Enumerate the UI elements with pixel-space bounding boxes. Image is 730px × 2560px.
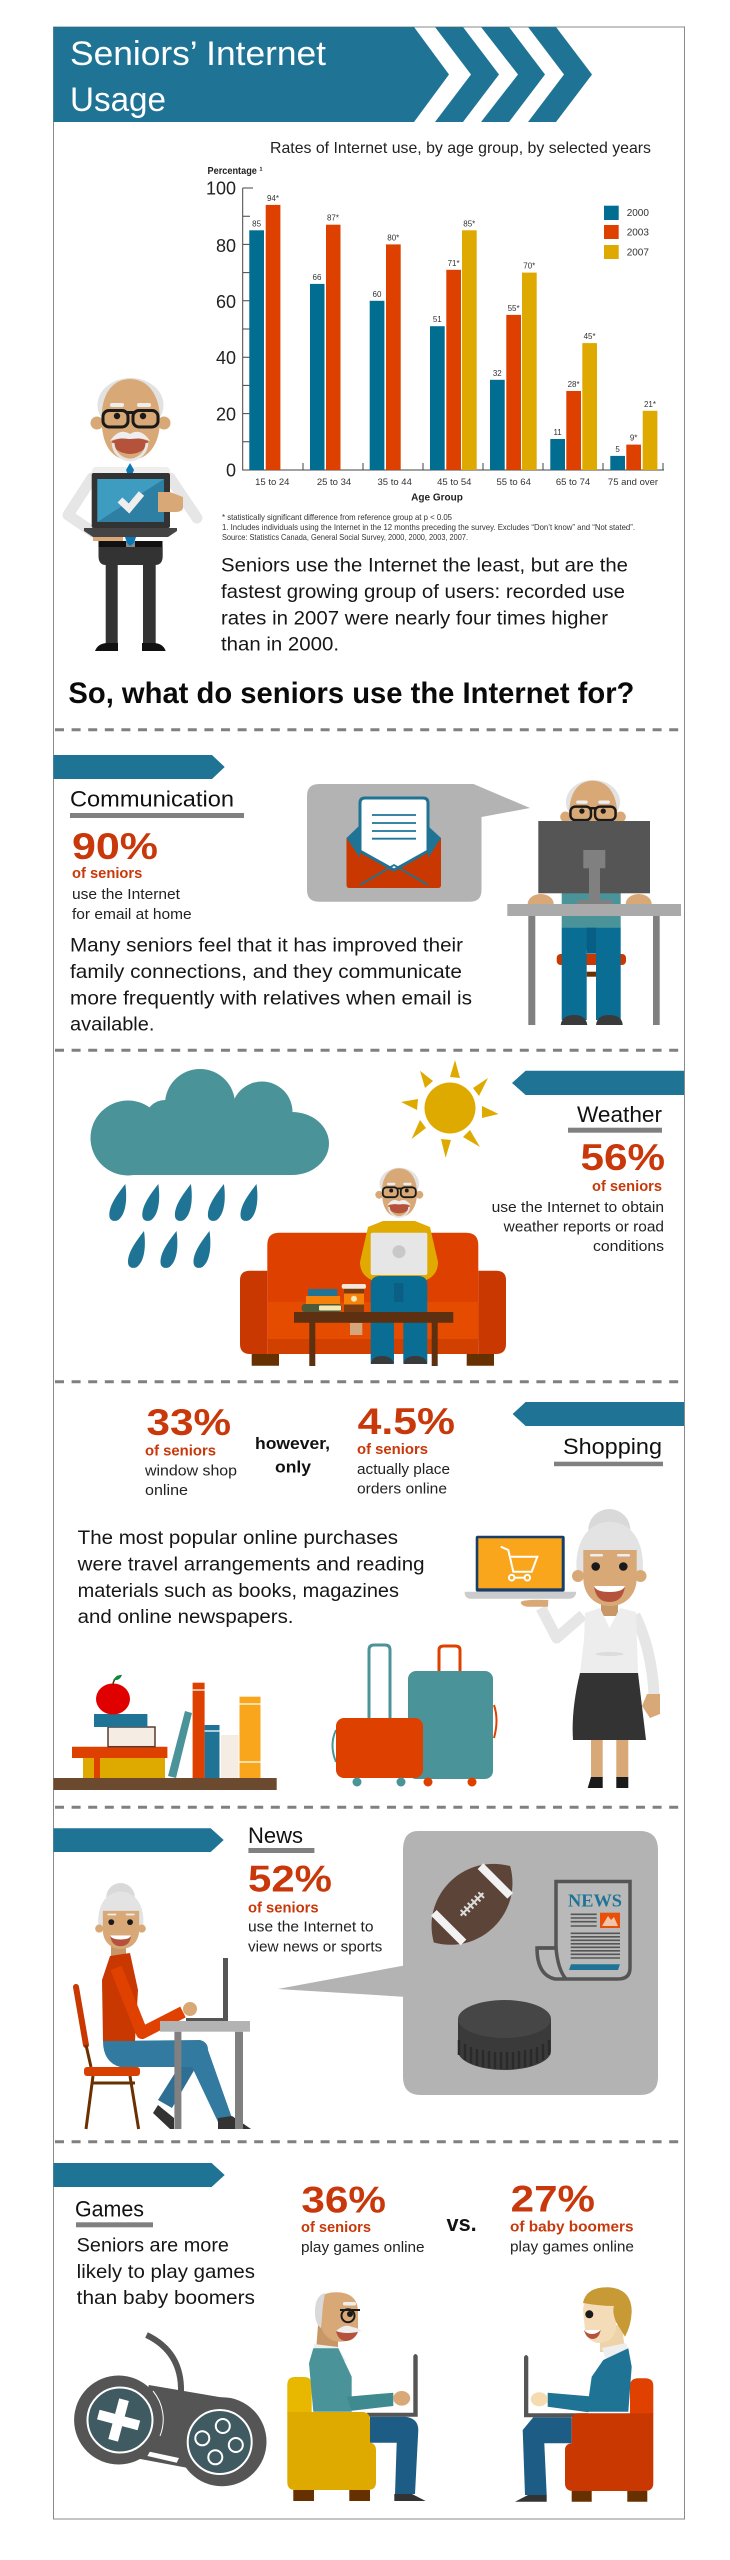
paragraph: likely to play games — [77, 2261, 255, 2283]
trousers — [371, 1276, 427, 1363]
laptop screen — [97, 479, 164, 522]
legs — [591, 1738, 628, 1778]
description: online — [145, 1482, 188, 1499]
bar chart: rates of Internet use — [206, 140, 664, 504]
description: weather reports or road — [503, 1219, 664, 1236]
teal handle — [369, 1645, 390, 1720]
hanging arm — [635, 1615, 654, 1695]
chevron 1 — [435, 27, 499, 122]
slit — [147, 2452, 179, 2463]
connector text: only — [275, 1458, 312, 1477]
illustration: senior in armchair — [287, 2292, 426, 2501]
title text line 2: Usage — [70, 81, 166, 119]
stat 56%: 56% — [580, 1137, 665, 1178]
of seniors: of seniors — [357, 1441, 428, 1458]
back shoe — [153, 2105, 174, 2129]
orange upright book — [240, 1697, 260, 1778]
y axis labels: 60 — [216, 292, 236, 312]
hand — [158, 492, 183, 512]
value labels: 5 — [615, 445, 620, 454]
heading underline — [554, 1462, 663, 1466]
panel: games — [54, 2163, 653, 2502]
paragraph — [77, 1527, 425, 1628]
pants hips — [98, 547, 163, 565]
intro paragraph: Seniors use the Internet the least, but are the — [221, 555, 628, 577]
y axis heading: Percentage ¹ — [208, 166, 263, 177]
teal case — [408, 1671, 493, 1779]
monitor stand — [577, 850, 612, 904]
paragraph: family connections, and they communicate — [70, 961, 462, 983]
stat 90%: 90% — [72, 826, 158, 867]
description: use the Internet to — [248, 1919, 374, 1936]
category labels: 65 to 74 — [556, 477, 590, 488]
front shoe — [218, 2116, 251, 2129]
laptop lid — [92, 473, 170, 528]
sofa back — [267, 1233, 478, 1340]
value labels: 51 — [433, 315, 442, 324]
description: orders online — [357, 1481, 447, 1498]
banner arrow body — [54, 27, 449, 122]
chair — [557, 954, 626, 965]
description: use the Internet to obtain — [492, 1199, 664, 1216]
category labels: 55 to 64 — [497, 477, 531, 488]
chart footnotes: 1. Includes individuals using the Internet in the 12 months preceding the survey. Excludes “Don’t know” and “Not stated”. — [222, 522, 635, 532]
sleeve — [548, 2393, 595, 2412]
sofa arm right — [478, 1271, 506, 1354]
illustration: woman at laptop — [76, 1883, 251, 2129]
screen shade — [97, 479, 164, 522]
blue book — [94, 1714, 147, 1727]
vs: vs. — [446, 2211, 477, 2236]
legs — [106, 565, 156, 645]
red handle — [439, 1646, 460, 1671]
icon: shopping cart — [501, 1547, 537, 1580]
heading: Communication — [70, 787, 234, 812]
icon: hockey puck — [458, 2000, 551, 2070]
value labels: 66 — [313, 273, 322, 282]
apple — [96, 1675, 130, 1714]
book stripes — [193, 1690, 260, 1762]
paragraph: were travel arrangements and reading — [77, 1554, 425, 1576]
hand — [531, 2392, 548, 2406]
chart footnotes — [222, 512, 635, 542]
heading: News — [248, 1823, 303, 1848]
bars 2003 — [266, 205, 641, 470]
intro paragraph: than in 2000. — [221, 634, 339, 656]
heading: so, what do seniors use the Internet for: So, what do seniors use the Internet for? — [68, 677, 634, 710]
pale book — [108, 1727, 155, 1747]
description — [492, 1199, 664, 1255]
category labels: 25 to 34 — [317, 477, 351, 488]
paragraph — [70, 935, 472, 1036]
leaning book — [168, 1711, 192, 1778]
cable — [146, 2335, 181, 2392]
y axis labels: 40 — [216, 348, 236, 368]
value labels: 9* — [630, 434, 637, 443]
value labels — [252, 194, 656, 454]
category labels: 15 to 24 — [255, 477, 289, 488]
shoes — [371, 1356, 427, 1364]
belt — [98, 541, 162, 547]
illustration: woman holding laptop — [465, 1509, 660, 1788]
description: conditions — [593, 1238, 664, 1255]
shoe — [515, 2495, 547, 2502]
chair frame — [86, 2045, 139, 2129]
section tab — [513, 1402, 684, 1426]
torso — [309, 2348, 352, 2412]
panel: weather — [90, 1060, 684, 1366]
sofa feet — [252, 1354, 494, 1366]
paragraph: than baby boomers — [77, 2287, 255, 2309]
value labels: 55* — [508, 304, 520, 313]
body — [135, 2385, 225, 2474]
chart footnotes: * statistically significant difference from reference group at p < 0.05 — [222, 512, 452, 522]
shirt arms — [68, 478, 197, 532]
y axis labels: 100 — [206, 178, 236, 198]
value labels: 85 — [252, 219, 262, 228]
section tab — [512, 1071, 684, 1095]
of seniors: of seniors — [301, 2219, 371, 2236]
shirt shoulders — [92, 467, 170, 479]
hand — [393, 2391, 410, 2406]
description line 1: use the Internet — [72, 886, 181, 903]
connector text: however, — [255, 1434, 330, 1453]
laptop logo — [392, 1245, 406, 1258]
illustration: senior man holding laptop — [68, 378, 197, 651]
back leg — [158, 2065, 196, 2108]
shoe — [394, 2494, 426, 2501]
panel: shopping — [54, 1401, 684, 1790]
heading underline — [248, 1848, 314, 1853]
description: window shop — [144, 1463, 237, 1480]
neck — [316, 2325, 338, 2352]
head — [95, 1883, 146, 1949]
laptop base — [84, 528, 177, 537]
sleeve — [347, 2393, 393, 2411]
icon: newspaper — [537, 1882, 630, 1979]
icon: cloud — [90, 1069, 329, 1176]
value labels: 71* — [448, 259, 460, 268]
head — [572, 1509, 646, 1606]
head — [583, 2287, 632, 2343]
legend: 2003 — [627, 227, 649, 238]
chair back — [76, 1987, 86, 2045]
value labels: 21* — [644, 400, 656, 409]
intro paragraph: fastest growing group of users: recorded use — [221, 581, 625, 603]
value labels: 70* — [523, 262, 535, 271]
torso — [587, 2348, 632, 2412]
panel: communication — [54, 755, 681, 1036]
illustration: baby boomer in armchair — [515, 2287, 653, 2502]
legend: 2000 — [627, 208, 649, 219]
collar — [602, 2343, 628, 2360]
laptop — [186, 1958, 228, 2021]
face — [90, 378, 170, 460]
neck — [601, 1600, 618, 1616]
y axis labels: 20 — [216, 404, 236, 424]
trousers shade — [587, 928, 596, 954]
chair bar — [587, 972, 596, 977]
stat 36%: 36% — [301, 2180, 386, 2221]
chair base — [565, 2413, 653, 2491]
intro paragraph: rates in 2007 were nearly four times higher — [221, 608, 609, 630]
icon: envelope with letter — [346, 798, 441, 888]
neck — [111, 1943, 126, 1957]
raised hand — [521, 1600, 548, 1607]
intro paragraph — [221, 555, 628, 656]
value labels: 28* — [568, 380, 580, 389]
stat 33%: 33% — [146, 1402, 231, 1443]
heading: Shopping — [563, 1434, 662, 1459]
chair back — [630, 2378, 653, 2414]
trousers — [562, 928, 621, 1020]
orange case — [336, 1718, 423, 1778]
icon: game controller — [74, 2335, 266, 2486]
panel: news — [54, 1823, 658, 2129]
value labels: 87* — [327, 214, 339, 223]
description — [144, 1463, 237, 1499]
x axis title: Age Group — [411, 493, 463, 504]
monitor — [538, 821, 650, 893]
hands — [528, 894, 652, 904]
category labels — [255, 477, 658, 488]
heading: Games — [75, 2197, 144, 2222]
heading underline — [76, 2222, 153, 2227]
of baby boomers: of baby boomers — [510, 2219, 634, 2236]
check mark — [120, 494, 142, 508]
of seniors: of seniors — [72, 865, 142, 882]
laptop — [367, 2354, 418, 2417]
paragraph: Many seniors feel that it has improved their — [70, 935, 464, 957]
desk legs — [528, 916, 660, 1025]
laptop screen — [476, 1536, 565, 1592]
y axis labels — [206, 178, 236, 480]
tie top — [126, 463, 134, 475]
paragraph: materials such as books, magazines — [78, 1580, 399, 1602]
table legs — [174, 2032, 243, 2129]
buckle — [126, 541, 135, 547]
sofa base — [267, 1339, 478, 1354]
chair feet — [572, 2491, 647, 2502]
description line 2: for email at home — [72, 906, 192, 923]
description: actually place — [357, 1461, 450, 1478]
value labels: 80* — [387, 233, 399, 242]
description — [248, 1919, 382, 1956]
blouse waist shade — [596, 1652, 624, 1656]
shoes — [95, 643, 166, 651]
seat — [84, 2067, 140, 2076]
books on table — [302, 1289, 342, 1312]
value labels: 32 — [493, 369, 502, 378]
laptop — [371, 1233, 427, 1275]
value labels: 45* — [584, 332, 596, 341]
chevron 2 — [481, 27, 545, 122]
category labels: 35 to 44 — [378, 477, 412, 488]
stat 52%: 52% — [248, 1859, 332, 1900]
illustration: luggage — [332, 1645, 496, 1786]
stat 27%: 27% — [511, 2179, 595, 2220]
left pad — [74, 2376, 163, 2464]
blue upright book — [205, 1725, 220, 1778]
paragraph — [77, 2235, 255, 2309]
boots — [588, 1777, 632, 1788]
paragraph: available. — [70, 1014, 154, 1036]
bars 2007 — [462, 230, 657, 470]
axes and ticks — [243, 188, 664, 470]
trousers shade — [394, 1283, 403, 1302]
chair base — [287, 2412, 376, 2490]
right button plate — [188, 2410, 252, 2474]
neck — [600, 2325, 625, 2352]
blouse — [580, 1608, 638, 1673]
category labels: 45 to 54 — [437, 477, 471, 488]
tie bottom — [125, 537, 136, 546]
left pad edge — [153, 2391, 163, 2436]
y axis labels: 0 — [226, 460, 236, 480]
torso — [360, 1221, 438, 1283]
red book — [72, 1747, 167, 1778]
value labels: 94* — [267, 194, 279, 203]
connector text — [255, 1434, 330, 1477]
table — [294, 1312, 453, 1366]
illustration: man at desk — [507, 780, 681, 1025]
paragraph: The most popular online purchases — [78, 1527, 398, 1549]
laptop display — [478, 1538, 562, 1588]
value labels: 60 — [373, 290, 382, 299]
heading underline — [568, 1128, 662, 1133]
chart footnotes: Source: Statistics Canada, General Social Survey, 2000, 2000, 2003, 2007. — [222, 532, 468, 542]
icon: sun — [401, 1060, 499, 1158]
shoes — [561, 1015, 623, 1025]
collar — [314, 2344, 347, 2362]
trousers — [370, 2417, 418, 2494]
icon: football — [412, 1844, 532, 1965]
value labels: 85* — [463, 219, 475, 228]
legend: 2007 — [627, 248, 649, 259]
title text line 1: Seniors’ Internet — [70, 35, 327, 73]
illustration: books on shelf — [54, 1675, 277, 1790]
heading underline — [70, 813, 244, 818]
head — [560, 780, 626, 847]
value labels: 11 — [553, 428, 562, 437]
section tab — [54, 755, 225, 779]
heading: Weather — [577, 1102, 662, 1127]
torso — [102, 1953, 138, 2041]
sofa arm left — [240, 1271, 267, 1354]
head — [375, 1168, 423, 1217]
skirt — [573, 1673, 646, 1740]
category labels: 75 and over — [608, 477, 658, 488]
icon: rain drops — [109, 1184, 257, 1268]
laptop base — [465, 1592, 576, 1599]
speech bubble — [278, 1831, 658, 2095]
section tab — [54, 1828, 224, 1852]
section tab — [54, 2163, 225, 2187]
action buttons — [195, 2419, 243, 2464]
box — [83, 1758, 165, 1778]
bars 2000 — [249, 230, 625, 470]
thigh and front leg — [103, 2040, 232, 2122]
hand — [183, 2002, 197, 2016]
of seniors: of seniors — [145, 1443, 216, 1460]
left button plate — [88, 2388, 152, 2452]
speech bubble — [307, 784, 530, 902]
red upright book — [193, 1683, 205, 1778]
d-pad cross — [93, 2394, 144, 2446]
sofa seat — [267, 1302, 478, 1339]
teal strap — [332, 1730, 336, 1762]
legend — [604, 206, 649, 259]
arm — [116, 1968, 183, 2033]
ankle — [350, 1323, 362, 1335]
description — [357, 1461, 450, 1498]
paragraph: Seniors are more — [77, 2235, 229, 2257]
description: play games online — [301, 2239, 425, 2256]
paragraph: more frequently with relatives when email is — [70, 987, 472, 1009]
desk top — [507, 904, 681, 916]
y axis labels: 80 — [216, 236, 236, 256]
coffee cup — [342, 1284, 366, 1312]
section dividers — [55, 730, 684, 2142]
raised arm — [541, 1608, 583, 1638]
chair feet — [293, 2490, 370, 2501]
table top — [160, 2021, 250, 2032]
stat 4.5%: 4.5% — [358, 1401, 455, 1442]
illustration: man on sofa with laptop — [240, 1168, 506, 1366]
head — [315, 2292, 362, 2342]
red strap — [494, 1705, 496, 1738]
description: view news or sports — [248, 1939, 382, 1956]
chart title: Rates of Internet use, by age group, by selected years — [270, 140, 651, 157]
lower hand — [93, 536, 123, 541]
title banner — [54, 27, 592, 122]
pale upright book — [221, 1735, 239, 1778]
chevron 3 — [528, 27, 592, 122]
trousers — [523, 2417, 572, 2495]
torso — [562, 893, 621, 928]
right pad — [178, 2397, 266, 2486]
of seniors: of seniors — [592, 1178, 662, 1195]
chair back — [287, 2377, 312, 2413]
shelf — [54, 1778, 277, 1790]
lower hand — [642, 1694, 660, 1718]
laptop — [524, 2355, 588, 2417]
icon: newspaper: NEWS — [568, 1891, 622, 1911]
description: play games online — [510, 2239, 634, 2256]
paragraph: and online newspapers. — [78, 1606, 294, 1628]
wheels — [352, 1778, 476, 1786]
of seniors: of seniors — [248, 1900, 319, 1917]
